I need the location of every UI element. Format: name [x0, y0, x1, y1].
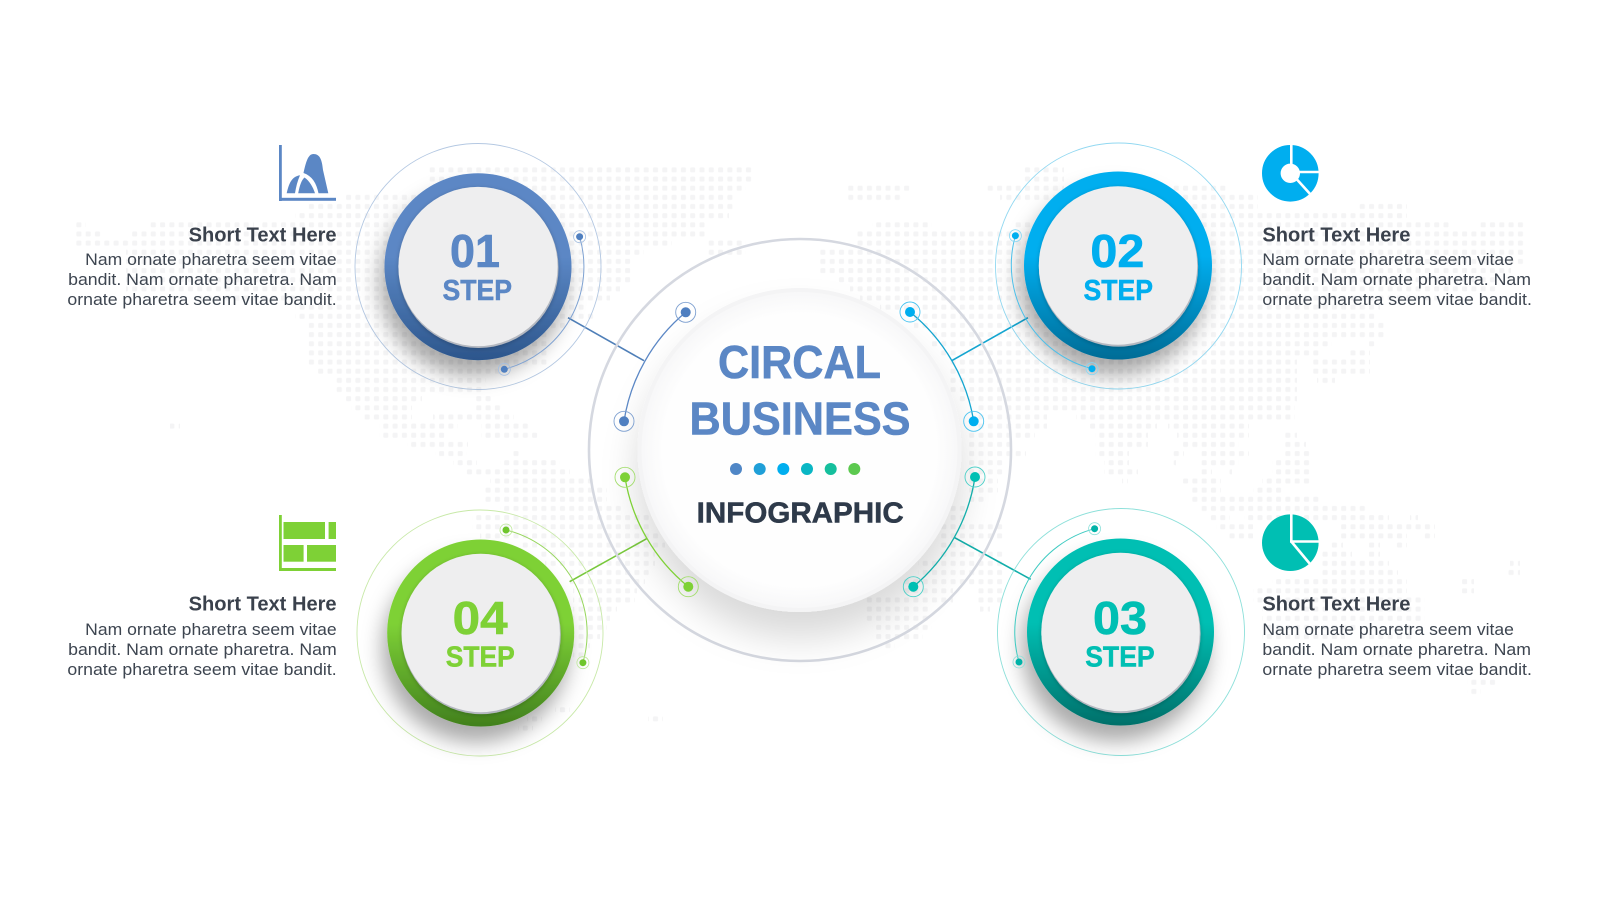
text block: step 02: Nam ornate pharetra seem vitae	[1262, 250, 1514, 269]
step 01 arc with end dots	[498, 231, 586, 375]
step 04 label: STEP	[446, 642, 515, 674]
icon: block table chart	[279, 515, 336, 571]
six colored dots	[730, 463, 860, 475]
step 04 arc with end dots	[500, 524, 589, 669]
step 02 arc with end dots	[1009, 230, 1098, 375]
text block: step 03	[1262, 593, 1532, 679]
step 03 outer ring	[998, 508, 1244, 756]
hub title	[690, 336, 910, 445]
outer hub ring	[589, 239, 1011, 661]
step 02 disc	[1039, 186, 1198, 347]
hub arc: teal	[903, 467, 985, 597]
step 01 label: STEP	[442, 275, 512, 307]
hub arc: green	[615, 467, 698, 597]
text block: step 01: Short Text Here	[189, 224, 337, 247]
panel: step 03	[998, 508, 1244, 756]
text block: step 01: ornate pharetra seem vitae bandit.	[67, 290, 337, 309]
hub title: CIRCAL	[718, 336, 881, 388]
step 01 number: 01	[450, 225, 500, 277]
text block: step 03: Short Text Here	[1262, 593, 1410, 616]
text block: step 02	[1262, 224, 1532, 309]
text block: step 04: Short Text Here	[189, 593, 337, 616]
text block: step 03: bandit. Nam ornate pharetra. Nam	[1262, 640, 1531, 659]
step 03 disc	[1041, 553, 1201, 713]
text block: step 02: ornate pharetra seem vitae bandit.	[1262, 290, 1532, 309]
text block: step 01: bandit. Nam ornate pharetra. Nam	[68, 270, 337, 289]
text block: step 04: bandit. Nam ornate pharetra. Nam	[68, 640, 337, 659]
panel: central hub	[589, 239, 1011, 661]
step 04 disc	[402, 554, 561, 714]
step 02 thick ring	[1024, 172, 1212, 360]
text block: step 04: Nam ornate pharetra seem vitae	[85, 620, 337, 639]
hub title: BUSINESS	[690, 393, 910, 445]
step 03 thick ring	[1027, 538, 1214, 726]
step 01 disc	[398, 187, 558, 348]
step 04 thick ring	[387, 540, 574, 726]
hub arc: cyan	[900, 302, 984, 431]
text block: step 03: Nam ornate pharetra seem vitae	[1262, 620, 1514, 639]
hub disc	[640, 290, 960, 610]
panel: step 01	[355, 144, 601, 390]
step 04 number: 04	[453, 592, 508, 644]
icon: pie chart	[1262, 512, 1322, 571]
panel: step 04	[357, 510, 603, 756]
text block: step 02: Short Text Here	[1262, 224, 1410, 247]
text block: step 03: ornate pharetra seem vitae bandit.	[1262, 660, 1532, 679]
step 01 thick ring	[384, 173, 572, 360]
step 02 outer ring	[996, 143, 1242, 389]
text block: step 01: Nam ornate pharetra seem vitae	[85, 250, 337, 269]
connector lines	[568, 318, 1031, 582]
text block: step 04: ornate pharetra seem vitae bandit.	[67, 660, 337, 679]
step 03 arc with end dots	[1013, 523, 1101, 668]
icon: bell curve chart	[279, 145, 336, 201]
world map dot background	[73, 165, 1526, 733]
step 02 number: 02	[1090, 225, 1144, 277]
text block: step 02: bandit. Nam ornate pharetra. Nam	[1262, 270, 1531, 289]
step 03 label: STEP	[1085, 642, 1155, 674]
step 03 number: 03	[1093, 592, 1147, 644]
hub subtitle: INFOGRAPHIC	[697, 498, 904, 530]
hub arc: blue	[614, 302, 696, 431]
step 01 outer ring	[355, 144, 601, 390]
step 04 outer ring	[357, 510, 603, 756]
text block: step 04	[67, 593, 337, 679]
panel: step 02	[996, 143, 1242, 389]
text block: step 01	[67, 224, 337, 309]
icon: donut chart	[1271, 143, 1322, 195]
step 02 label: STEP	[1084, 275, 1153, 307]
